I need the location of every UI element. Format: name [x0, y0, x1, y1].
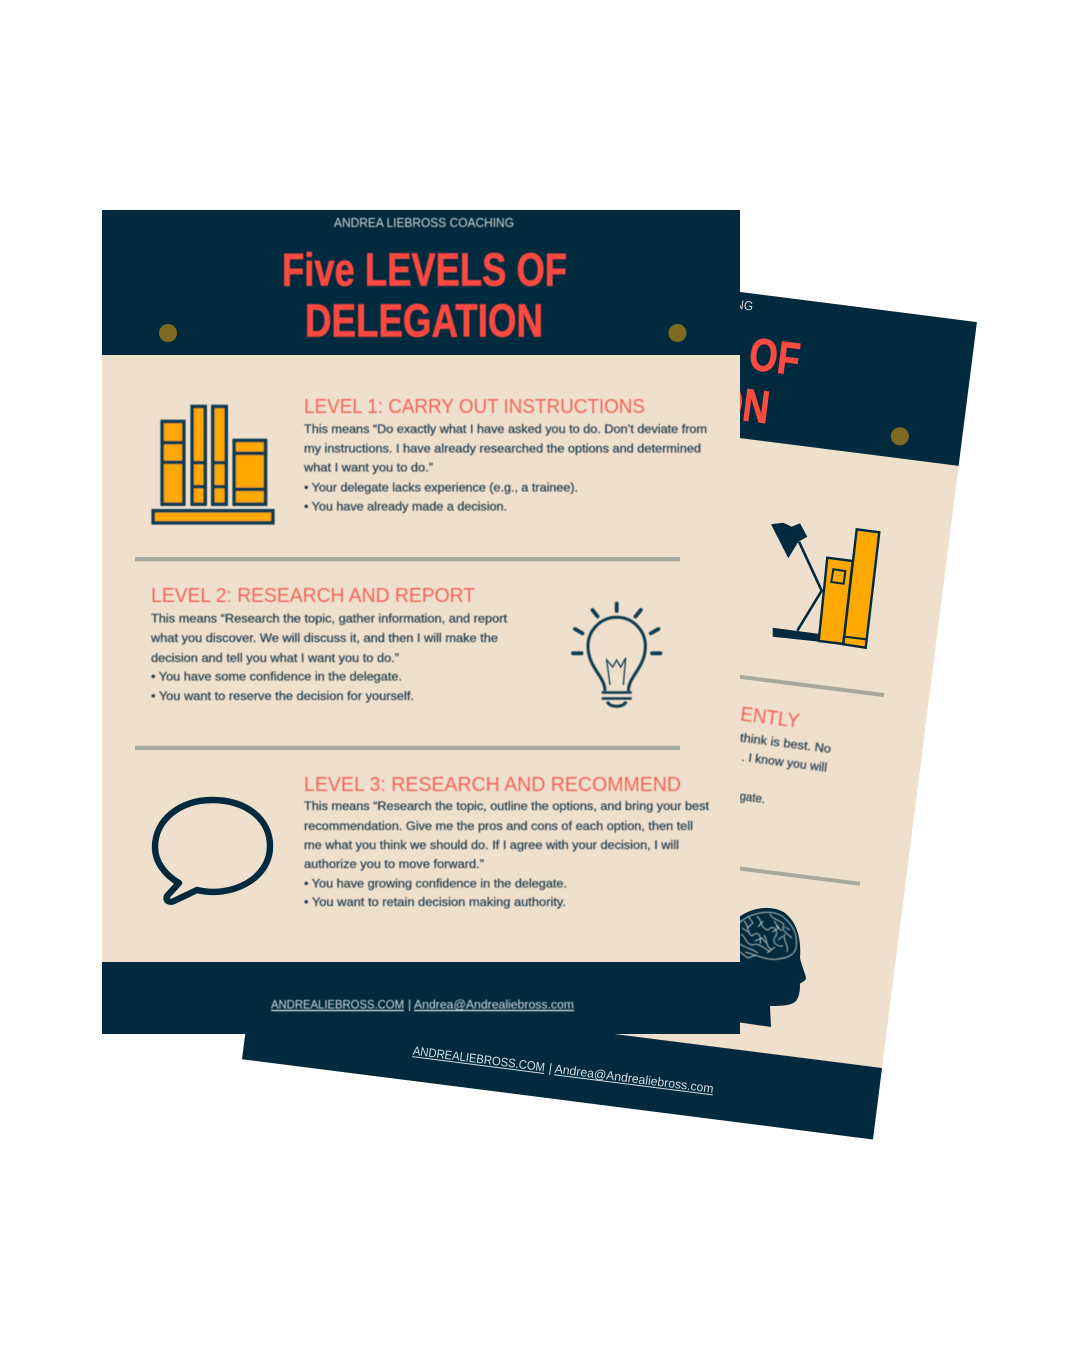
title: DELEGATION	[305, 294, 543, 346]
back page header band: Five LEVELS OF	[514, 298, 803, 385]
header dot left	[159, 324, 177, 342]
header band	[102, 210, 740, 355]
front page	[102, 210, 740, 1034]
title	[282, 244, 567, 346]
level 3 body: me what you think we should do. If I agree with your decision, I will	[304, 838, 679, 852]
level 3 text block	[304, 774, 710, 909]
level 2 body	[150, 612, 508, 703]
level 1 body: This means “Do exactly what I have asked you to do. Don’t deviate from	[304, 422, 707, 436]
title: Five LEVELS OF	[282, 244, 567, 296]
front page background	[102, 210, 740, 1034]
level 3 body: • You want to retain decision making authority.	[304, 895, 566, 909]
brand line: ANDREA LIEBROSS COACHING	[334, 215, 514, 230]
back page: rotated sheet	[242, 242, 977, 1139]
level 3 heading: LEVEL 3: RESEARCH AND RECOMMEND	[304, 774, 681, 796]
icon: books on a shelf	[153, 406, 273, 523]
icon: head with brain	[730, 908, 806, 1027]
level 3 body: This means “Research the topic, outline the options, and bring your best	[304, 799, 710, 813]
back page header band: DELEGATION	[530, 352, 773, 433]
footer band	[102, 962, 740, 1034]
back page level text fragments: ENTLY	[739, 703, 801, 733]
level 1 body: • You have already made a decision.	[304, 500, 507, 514]
back page level text fragments: . I know you will	[741, 750, 828, 775]
level 2 body: • You want to reserve the decision for yourself.	[151, 689, 414, 703]
icon: speech bubble	[155, 800, 270, 902]
level 1 text block	[303, 396, 707, 514]
level 1 body: • Your delegate lacks experience (e.g., a trainee).	[304, 480, 578, 494]
back page header band	[328, 242, 977, 466]
back page level text fragments	[729, 703, 835, 814]
footer contact links	[271, 998, 574, 1012]
level 2 text block	[150, 585, 508, 703]
level 2 body: decision and tell you what I want you to do.”	[151, 651, 399, 665]
icon: light bulb	[573, 604, 660, 706]
back page level text fragments: think is best. No	[739, 731, 832, 756]
level 1 body	[303, 422, 707, 514]
level 3 body: • You have growing confidence in the delegate.	[304, 876, 567, 890]
level 2 body: what you discover. We will discuss it, and then I will make the	[150, 631, 498, 645]
footer contact links: Andrea@Andrealiebross.com	[414, 998, 574, 1012]
back page level text fragments: gate.	[739, 789, 766, 806]
level 1 body: what I want you to do.”	[303, 460, 433, 474]
back page header band: ANDREA LIEBROSS COACHING	[574, 276, 754, 314]
footer contact links: |	[408, 998, 411, 1012]
back page footer band: ANDREALIEBROSS.COM	[412, 1044, 546, 1074]
back page footer band: |	[548, 1061, 553, 1075]
header dot right	[668, 324, 686, 342]
level 1 heading: LEVEL 1: CARRY OUT INSTRUCTIONS	[304, 396, 645, 418]
back page footer band: Andrea@Andrealiebross.com	[554, 1062, 714, 1096]
level 3 body	[304, 799, 710, 909]
footer contact links: ANDREALIEBROSS.COM	[271, 998, 404, 1012]
back page footer band	[242, 988, 882, 1139]
level 1 body: my instructions. I have already researched the options and determined	[304, 442, 701, 456]
level 2 heading: LEVEL 2: RESEARCH AND REPORT	[151, 585, 475, 607]
level 3 body: authorize you to move forward.”	[304, 857, 484, 871]
level 3 body: recommendation. Give me the pros and cons of each option, then tell	[304, 819, 693, 833]
level 2 body: This means “Research the topic, gather information, and report	[151, 612, 508, 626]
icon: desk lamp and books	[771, 523, 879, 648]
back page body	[242, 242, 977, 1139]
level 2 body: • You have some confidence in the delegate.	[151, 670, 402, 684]
